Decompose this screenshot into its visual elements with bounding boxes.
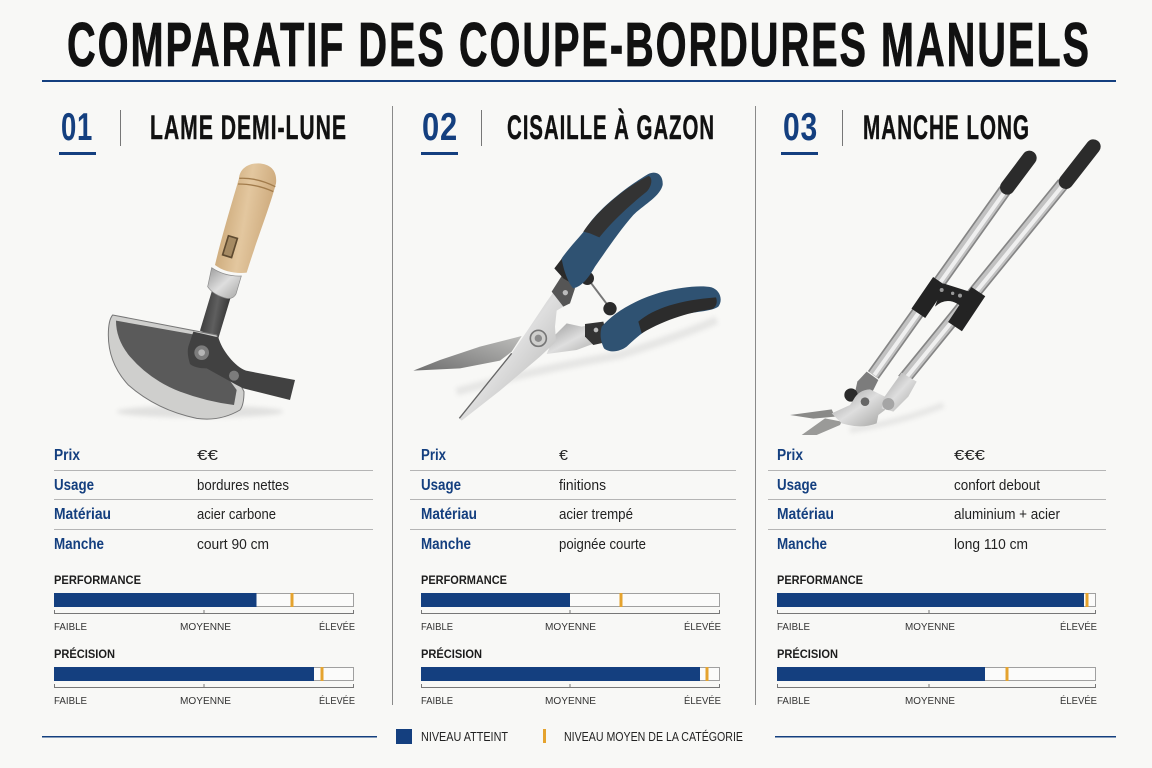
spec table: Usage bbox=[54, 477, 94, 494]
spec table: Manche bbox=[54, 536, 104, 553]
chart: performance: PERFORMANCE bbox=[54, 573, 141, 587]
spec table: court 90 cm bbox=[197, 537, 269, 553]
panel: lame demi-lune bbox=[54, 106, 373, 707]
legend: NIVEAU MOYEN DE LA CATÉGORIE bbox=[564, 729, 743, 744]
spec table: aluminium + acier bbox=[954, 507, 1060, 523]
chart: précision: MOYENNE bbox=[905, 695, 955, 707]
chart: performance bbox=[421, 573, 721, 633]
spec table: Manche bbox=[777, 536, 827, 553]
chart: précision bbox=[777, 646, 1097, 707]
chart: précision: FAIBLE bbox=[54, 695, 87, 707]
panel heading 01 bbox=[59, 106, 347, 155]
spec table: confort debout bbox=[954, 478, 1040, 494]
spec table: long 110 cm bbox=[954, 537, 1028, 553]
chart: performance: PERFORMANCE bbox=[421, 573, 507, 587]
panel heading 02: CISAILLE À GAZON bbox=[507, 109, 715, 147]
spec table: acier carbone bbox=[197, 507, 276, 523]
spec table: € bbox=[559, 448, 568, 464]
spec table: Matériau bbox=[777, 506, 834, 523]
chart: précision: FAIBLE bbox=[777, 695, 810, 707]
panel: cisaille à gazon bbox=[410, 106, 736, 707]
panel heading 02: 02 bbox=[422, 106, 458, 149]
chart: performance: ÉLEVÉE bbox=[684, 620, 721, 633]
chart: performance: ÉLEVÉE bbox=[1060, 620, 1097, 633]
spec table: Prix bbox=[421, 447, 446, 464]
panel heading 03: 03 bbox=[783, 106, 818, 149]
chart: performance: ÉLEVÉE bbox=[319, 620, 355, 633]
spec table: Prix bbox=[777, 447, 803, 464]
chart: performance: FAIBLE bbox=[777, 621, 810, 633]
spec table: Manche bbox=[421, 536, 471, 553]
chart: performance bbox=[777, 573, 1097, 633]
chart: précision bbox=[54, 646, 355, 707]
chart: précision: PRÉCISION bbox=[54, 646, 115, 661]
spec table bbox=[768, 447, 1106, 553]
chart: performance bbox=[54, 573, 355, 633]
chart: précision: FAIBLE bbox=[421, 695, 453, 707]
spec table: Usage bbox=[777, 477, 817, 494]
spec table: bordures nettes bbox=[197, 478, 289, 494]
chart: précision: MOYENNE bbox=[545, 695, 596, 707]
panel heading 01: 01 bbox=[61, 106, 93, 149]
panel heading 03 bbox=[781, 106, 1030, 155]
spec table: poignée courte bbox=[559, 537, 646, 553]
chart: précision: PRÉCISION bbox=[421, 646, 482, 661]
chart: performance: MOYENNE bbox=[180, 621, 231, 633]
chart: performance: FAIBLE bbox=[54, 621, 87, 633]
spec table: Usage bbox=[421, 477, 461, 494]
spec table: €€€ bbox=[954, 448, 985, 464]
icon: half-moon edging blade bbox=[108, 163, 295, 419]
chart: performance: MOYENNE bbox=[905, 621, 955, 633]
chart: précision: ÉLEVÉE bbox=[319, 694, 355, 707]
chart: précision bbox=[421, 646, 721, 707]
spec table: acier trempé bbox=[559, 507, 633, 523]
chart: performance: MOYENNE bbox=[545, 621, 596, 633]
chart: précision: PRÉCISION bbox=[777, 646, 838, 661]
chart: précision: ÉLEVÉE bbox=[1060, 694, 1097, 707]
legend: NIVEAU ATTEINT bbox=[421, 730, 508, 744]
spec table bbox=[410, 447, 736, 553]
icon: grass shears bbox=[413, 173, 721, 421]
spec table: €€ bbox=[197, 448, 218, 464]
spec table: Matériau bbox=[54, 506, 111, 523]
icon: long-handled shears bbox=[790, 147, 1093, 435]
chart: performance: PERFORMANCE bbox=[777, 573, 863, 587]
chart: performance: FAIBLE bbox=[421, 621, 453, 633]
spec table: Matériau bbox=[421, 506, 477, 523]
chart: précision: MOYENNE bbox=[180, 695, 231, 707]
panel heading 02 bbox=[421, 106, 715, 155]
panel: manche long bbox=[768, 106, 1106, 707]
spec table bbox=[54, 447, 373, 553]
panel heading 01: LAME DEMI-LUNE bbox=[150, 109, 347, 147]
spec table: Prix bbox=[54, 447, 80, 464]
legend bbox=[42, 729, 1116, 744]
spec table: finitions bbox=[559, 478, 606, 494]
chart: précision: ÉLEVÉE bbox=[684, 694, 721, 707]
panel heading 03: MANCHE LONG bbox=[863, 109, 1030, 147]
